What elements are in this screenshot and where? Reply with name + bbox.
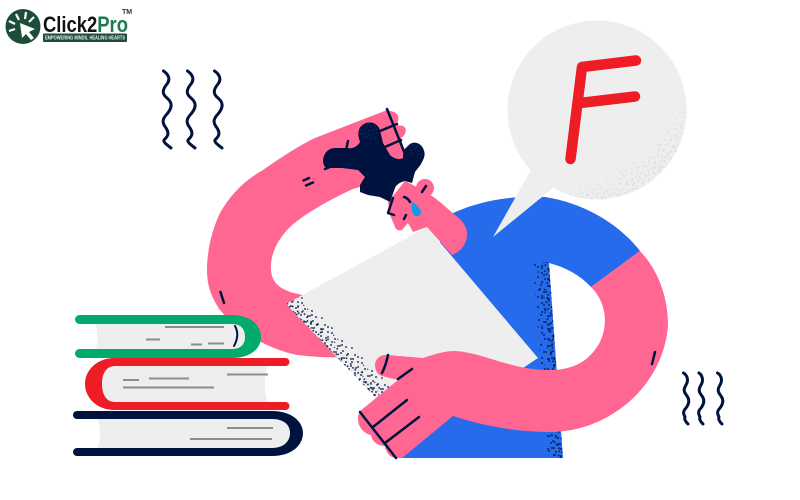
head <box>323 109 467 255</box>
trademark: TM <box>122 9 132 16</box>
hair <box>323 122 425 202</box>
finger lines <box>325 109 405 169</box>
right arm and hand <box>358 251 668 458</box>
logo tagline: EMPOWERING MINDS, HEALING HEARTS <box>45 36 126 42</box>
hand lines <box>360 352 655 458</box>
exam paper <box>286 227 538 420</box>
speech bubble <box>493 20 686 237</box>
paper edge shading <box>286 296 393 397</box>
face lines <box>388 186 426 219</box>
logo <box>6 9 132 44</box>
arm crease marks <box>220 178 313 303</box>
letter F grade <box>570 60 636 159</box>
hair shading <box>360 122 424 155</box>
left arm <box>207 110 406 357</box>
torso shading <box>533 260 563 458</box>
book: green <box>75 315 261 358</box>
squiggles: right <box>684 373 723 424</box>
logo mark <box>6 9 40 44</box>
logo wordmark: Click2Pro <box>43 12 128 37</box>
torso: blue shirt <box>328 197 640 458</box>
book: navy <box>73 411 303 456</box>
book stack <box>73 315 303 456</box>
bubble shading <box>570 106 686 200</box>
icon: tear drop <box>412 202 421 216</box>
book: red <box>85 358 290 410</box>
squiggles: left <box>163 71 222 148</box>
